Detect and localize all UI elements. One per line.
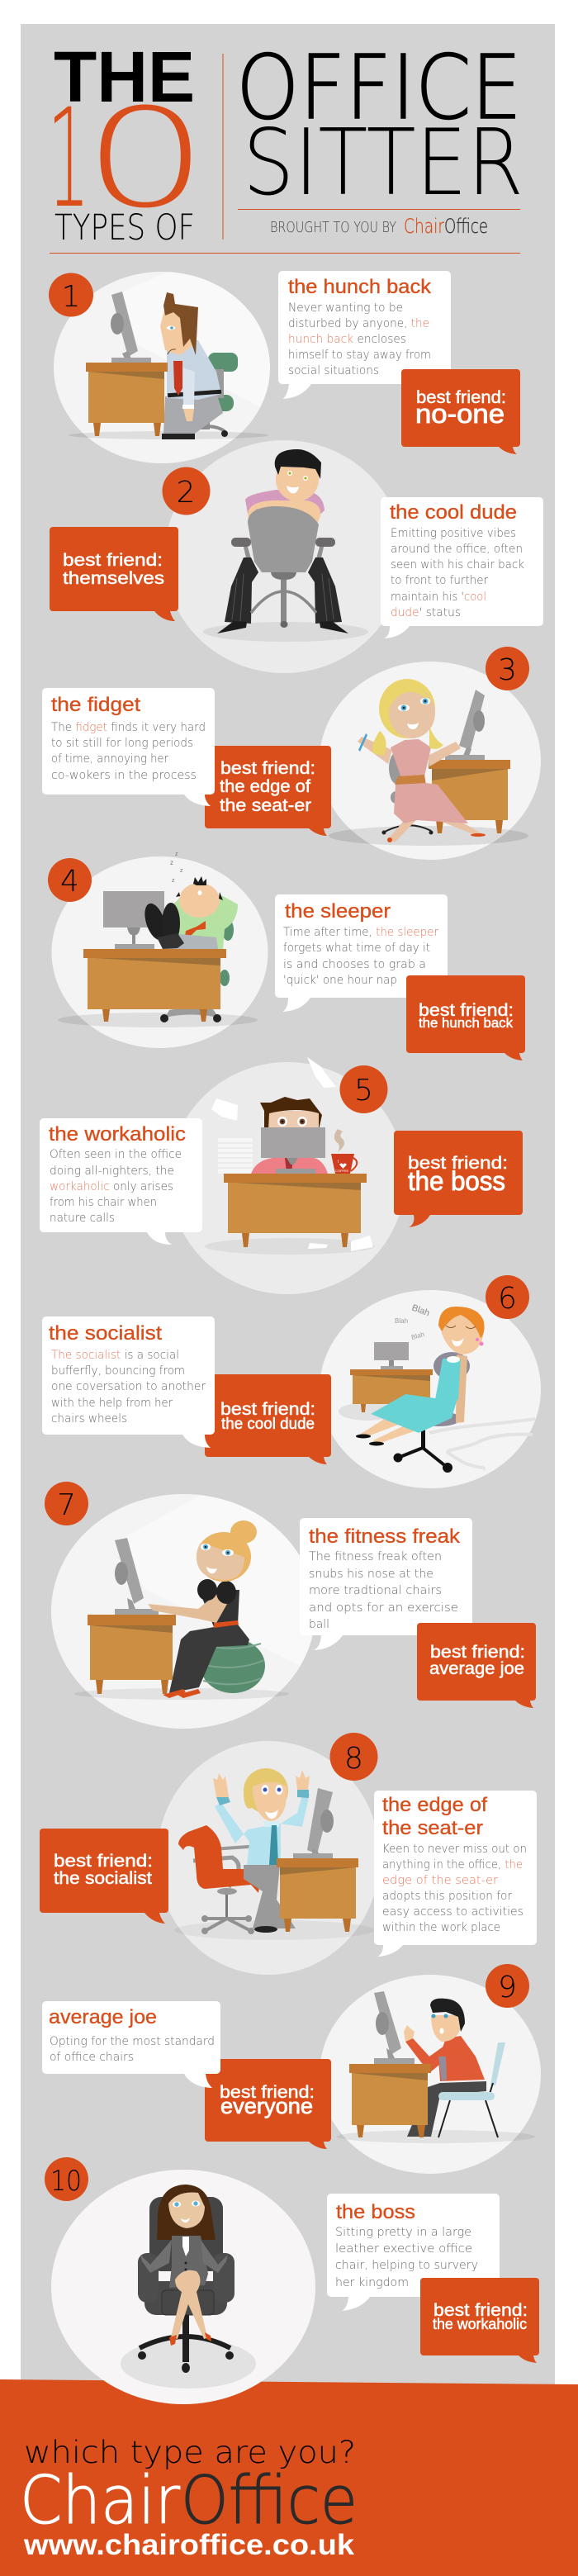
circle backdrop (320, 662, 541, 860)
description: forgets what time of day it (283, 942, 430, 955)
description: hunch back encloses (288, 333, 406, 346)
description: doing all-nighters, the (50, 1165, 174, 1178)
heading: the hunch back (288, 276, 432, 298)
best friend box (394, 1131, 523, 1227)
title: 10: 0 (83, 79, 209, 238)
number badge 7 (45, 1482, 88, 1525)
heading: average joe (49, 2006, 157, 2028)
circle backdrop (169, 1062, 405, 1294)
description: workaholic only arises (50, 1180, 173, 1193)
description: snubs his nose at the (309, 1568, 434, 1581)
figure: sleeping man with feet on desk: z (175, 852, 178, 857)
best friend box: the socialist (54, 1869, 152, 1888)
description: chairs wheels (51, 1412, 127, 1426)
title: sitter: SITTER (243, 110, 524, 216)
chairoffice logo: Office (181, 2462, 358, 2539)
description: dude' status (391, 606, 461, 619)
description: The socialist is a social (51, 1349, 179, 1362)
circle backdrop (51, 1494, 315, 1729)
description (382, 1843, 527, 1934)
best friend box: the hunch back (419, 1015, 513, 1031)
best friend box: best friend: (220, 2083, 315, 2102)
figure: man behind monitor: COFFEE (335, 1169, 349, 1173)
title: 10: 1 (47, 79, 90, 238)
description: disturbed by anyone, the (288, 317, 429, 330)
speech bubble (42, 688, 215, 806)
description: Time after time, the sleeper (283, 926, 438, 939)
description (51, 1349, 206, 1426)
description: maintain his 'cool (391, 591, 486, 604)
speech bubble (381, 497, 543, 638)
best friend box: best friend: (419, 1001, 514, 1020)
speech bubble (42, 1316, 215, 1448)
best friend box: best friend: (220, 759, 315, 778)
description: chair, helping to survery (335, 2259, 478, 2272)
heading: the sleeper (285, 900, 391, 923)
heading: the seat-er (382, 1817, 483, 1839)
description: himself to stay away from (288, 349, 431, 362)
best friend box (40, 1829, 168, 1924)
description: from his chair when (50, 1196, 157, 1209)
panel: the boss (45, 2157, 539, 2404)
description: her kingdom (335, 2276, 409, 2289)
number badge 9 (486, 1964, 529, 2008)
figure: socialist woman rolling on chair (350, 1303, 484, 1473)
circle backdrop (54, 272, 270, 463)
chairoffice logo small: Chair (404, 215, 444, 238)
description: anything in the office, the (382, 1858, 523, 1872)
description: The fitness freak often (309, 1550, 442, 1563)
figure: man behind monitor (218, 1097, 367, 1247)
number badge 1: 1 (62, 280, 80, 314)
number badge 7: 7 (57, 1488, 76, 1522)
title: types of: TYPES OF (54, 207, 195, 249)
figure: man behind monitor: I (338, 1160, 339, 1165)
chairoffice logo small (404, 215, 488, 238)
panel: the sleeper (48, 852, 525, 1060)
description: around the office, often (391, 543, 523, 556)
best friend box: best friend: (408, 1154, 508, 1173)
figure: sleeping man with feet on desk: z (172, 878, 175, 884)
number badge 8 (330, 1733, 378, 1781)
description (335, 2226, 478, 2289)
best friend box: best friend: (220, 1400, 315, 1419)
heading: the cool dude (390, 501, 517, 524)
chairoffice logo (20, 2462, 358, 2539)
best friend box: themselves (63, 569, 164, 588)
heading: the fitness freak (309, 1525, 461, 1548)
best friend box: best friend: (63, 551, 163, 570)
speech bubble (327, 2194, 500, 2311)
description (288, 301, 431, 377)
best friend box (420, 2278, 539, 2363)
figure: socialist woman rolling on chair: Blah (410, 1331, 425, 1341)
description (309, 1550, 458, 1631)
panel: the fitness freak (45, 1482, 536, 1729)
number badge 6: 6 (498, 1282, 517, 1316)
description: edge of the seat-er (382, 1874, 498, 1887)
best friend box (417, 1623, 536, 1708)
description: one coversation to another (51, 1380, 206, 1393)
best friend box: average joe (429, 1659, 524, 1678)
number badge 4: 4 (60, 865, 79, 899)
description: Never wanting to be (288, 301, 403, 315)
best friend box: everyone (220, 2094, 313, 2118)
description: leather exective office (335, 2242, 472, 2256)
best friend box: best friend: (430, 1643, 525, 1662)
description: more tradtional chairs (309, 1584, 442, 1597)
circle backdrop (320, 1975, 541, 2174)
circle backdrop (51, 856, 268, 1048)
title: office: OFFICE (236, 37, 522, 140)
best friend box (50, 527, 178, 621)
panel: the workaholic (40, 1057, 523, 1294)
number badge 2: 2 (177, 476, 195, 510)
best friend box: the cool dude (221, 1416, 315, 1433)
number badge 9: 9 (498, 1971, 517, 2004)
description: is and chooses to grab a (283, 958, 426, 971)
figure: hunched man at desk (86, 292, 238, 439)
number badge 5: 5 (354, 1074, 373, 1108)
number badge 3: 3 (498, 653, 517, 687)
best friend box (406, 975, 525, 1060)
description: bufferfly, bouncing from (51, 1364, 185, 1378)
description (50, 2035, 215, 2064)
number badge 2 (162, 467, 210, 515)
number badge 6 (486, 1275, 529, 1319)
heading: the fidget (51, 694, 140, 716)
figure: socialist woman rolling on chair: Blah (410, 1303, 431, 1318)
best friend box: best friend: (434, 2301, 528, 2320)
number badge 3 (486, 647, 529, 690)
best friend box: best friend: (416, 388, 506, 407)
footer (0, 2379, 578, 2576)
description: co-wokers in the process (51, 769, 197, 782)
header (47, 37, 524, 254)
panel: the hunch back (49, 264, 520, 463)
description: seen with his chair back (391, 558, 524, 572)
speech bubble (42, 2001, 220, 2088)
best friend box (401, 369, 520, 454)
description: to front to further (391, 574, 488, 587)
panel: the fidget (42, 647, 541, 860)
speech bubble (40, 1118, 202, 1245)
description: to sit still for long periods (51, 737, 193, 750)
heading: the socialist (49, 1322, 162, 1345)
description: ball (309, 1618, 329, 1631)
best friend box (205, 746, 331, 836)
website url: www.chairoffice.co.uk (23, 2529, 355, 2561)
best friend box: best friend: (54, 1852, 153, 1871)
chairoffice logo: Chair (20, 2462, 180, 2539)
figure: socialist woman rolling on chair: Blah (395, 1317, 408, 1325)
circle backdrop (164, 440, 404, 673)
heading: the workaholic (49, 1123, 186, 1146)
description (51, 721, 206, 782)
description: within the work place (382, 1921, 500, 1934)
description: 'quick' one hour nap (283, 974, 397, 987)
speech bubble (300, 1518, 472, 1650)
figure: fidgeting woman at desk (358, 679, 510, 842)
title: the: THE (54, 37, 195, 117)
figure: man at desk on plain chair (349, 1991, 505, 2137)
best friend box: no-one (415, 399, 505, 429)
description: Opting for the most standard (50, 2035, 215, 2048)
description: Emitting positive vibes (391, 527, 516, 540)
which type are you: which type are you? (24, 2435, 356, 2470)
figure: man sitting backwards on chair (217, 449, 348, 633)
number badge 10: 10 (50, 2165, 82, 2198)
title: 10 (47, 79, 209, 238)
heading: the boss (336, 2201, 415, 2223)
description: social situations (288, 364, 379, 377)
best friend box (205, 2059, 331, 2149)
figure: woman in executive chair (138, 2185, 235, 2373)
circle backdrop (320, 1290, 541, 1488)
description: Sitting pretty in a large (335, 2226, 471, 2239)
best friend box: the workaholic (433, 2316, 527, 2332)
number badge 10 (45, 2157, 88, 2201)
description (283, 926, 438, 987)
heading: the edge of (382, 1794, 487, 1816)
description: The fidget finds it very hard (51, 721, 206, 734)
description: adopts this position for (382, 1890, 512, 1903)
circle backdrop (157, 1741, 380, 1975)
panel: the cool dude (50, 440, 543, 673)
description: Often seen in the office (50, 1148, 182, 1161)
description (50, 1148, 182, 1225)
panel: the edge of the seat-er (40, 1733, 537, 1975)
speech bubble (374, 1791, 537, 1957)
number badge 1 (49, 273, 93, 317)
figure: excited man on edge of red chair (178, 1768, 358, 1934)
figure: sleeping man with feet on desk (83, 852, 238, 1022)
figure: sleeping man with feet on desk: z (170, 859, 173, 866)
circle backdrop (51, 2170, 315, 2404)
best friend box: the boss (408, 1166, 505, 1196)
description: of office chairs (50, 2051, 134, 2064)
description: and opts for an exercise (309, 1601, 458, 1615)
speech bubble (278, 271, 451, 399)
description: of time, annoying her (51, 752, 168, 766)
description: with the help from her (51, 1397, 173, 1410)
description: easy access to activities (382, 1905, 524, 1919)
description (391, 527, 524, 619)
best friend box (205, 1374, 331, 1464)
brought to you by: BROUGHT TO YOU BY (270, 219, 396, 236)
speech bubble (275, 894, 448, 1012)
number badge 8: 8 (344, 1742, 363, 1776)
figure: sleeping man with feet on desk: z (180, 868, 183, 874)
panel: the socialist (42, 1275, 541, 1488)
description: nature calls (50, 1212, 115, 1225)
description: Keen to never miss out on (382, 1843, 527, 1856)
figure: woman on exercise ball (88, 1520, 265, 1698)
flying papers (211, 1057, 373, 1251)
chairoffice logo small: Office (444, 215, 488, 238)
number badge 4 (48, 858, 92, 902)
best friend box: the edge of (220, 777, 310, 796)
panel: average joe (42, 1964, 541, 2174)
number badge 5 (340, 1065, 388, 1113)
heading (382, 1794, 487, 1839)
best friend box: the seat-er (220, 796, 311, 815)
